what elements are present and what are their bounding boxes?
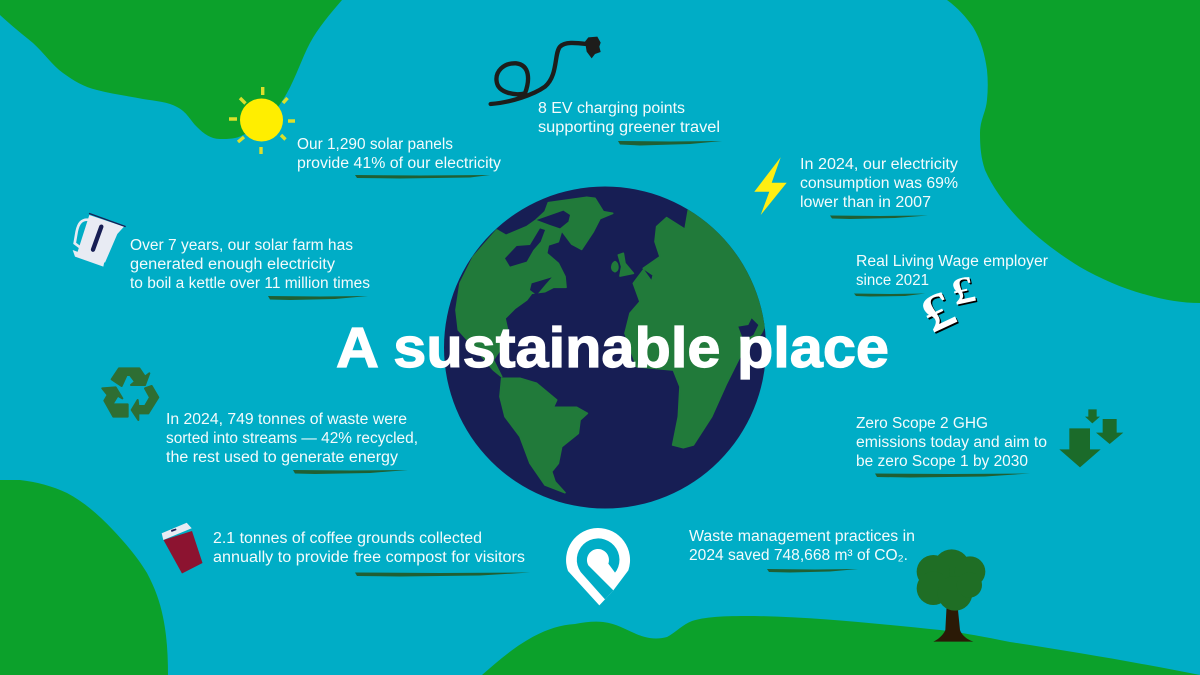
stat: kettle: to boil a kettle over 11 million times — [130, 275, 370, 292]
stat: coffee grounds: 2.1 tonnes of coffee grounds collected — [213, 530, 482, 547]
icon: down arrows — [1059, 409, 1123, 467]
stat: kettle: generated enough electricity — [130, 256, 335, 273]
baffin bay — [537, 211, 570, 228]
hudson bay — [505, 228, 545, 267]
stat: scope emissions: be zero Scope 1 by 2030 — [856, 453, 1028, 470]
hill: top right — [947, 0, 1200, 303]
icon: lightning bolt — [754, 157, 787, 215]
stat: coffee grounds: annually to provide free compost for visitors — [213, 549, 525, 566]
icon: pound signs: £ — [913, 280, 964, 344]
iceland and uk — [612, 253, 633, 276]
logo — [566, 528, 630, 605]
stat: electricity consumption: lower than in 2007 — [800, 194, 931, 211]
stat: solar panels: Our 1,290 solar panels — [297, 136, 453, 153]
north america — [456, 197, 613, 377]
icon: tree — [917, 549, 985, 642]
icon: pound signs: £ — [914, 281, 966, 346]
stat: waste management CO2: Waste management practices in — [689, 528, 915, 545]
stat: waste management CO2 — [689, 528, 985, 642]
icon: pound signs — [913, 268, 981, 346]
gulf — [530, 277, 552, 295]
icon: sun — [229, 87, 295, 154]
south america — [500, 378, 587, 493]
stat: kettle: Over 7 years, our solar farm has — [130, 237, 353, 254]
hill: top left — [0, 0, 342, 139]
stat: electricity consumption: In 2024, our electricity — [800, 156, 958, 173]
stat: electricity consumption — [754, 156, 958, 219]
stat: real living wage: Real Living Wage employer — [856, 253, 1048, 270]
globe — [444, 186, 797, 508]
stat: waste recycling — [102, 368, 418, 474]
stat: EV charging: supporting greener travel — [538, 119, 720, 136]
title: A sustainable place — [336, 316, 889, 380]
stat: waste recycling: the rest used to generate energy — [166, 449, 398, 466]
hill: bottom left — [0, 480, 168, 675]
stat: waste recycling: sorted into streams — 42% recycled, — [166, 430, 418, 447]
stat: solar panels: provide 41% of our electricity — [297, 155, 501, 172]
eurasia and africa — [624, 209, 765, 448]
stat: EV charging: 8 EV charging points — [538, 100, 685, 117]
continents — [456, 197, 797, 493]
icon: recycling arrows — [102, 368, 158, 420]
stat: kettle — [73, 213, 370, 300]
hill: bottom — [482, 616, 1200, 675]
stat: solar panels — [229, 87, 501, 178]
stat: waste management CO2: 2024 saved 748,668 m³ of CO₂. — [689, 547, 908, 564]
stat: EV charging — [491, 37, 722, 146]
icon: coffee cup — [162, 523, 202, 574]
stat: real living wage: since 2021 — [856, 272, 929, 289]
icon: pound signs: £ — [950, 270, 981, 315]
icon: plug and cable — [491, 37, 601, 104]
stat: coffee grounds — [162, 523, 530, 576]
icon: kettle — [73, 213, 126, 267]
stat: electricity consumption: consumption was 69% — [800, 175, 958, 192]
stat: waste recycling: In 2024, 749 tonnes of waste were — [166, 411, 407, 428]
icon: pound signs: £ — [948, 268, 979, 314]
ocean — [444, 186, 766, 508]
stat: scope emissions: Zero Scope 2 GHG — [856, 415, 988, 432]
stat: scope emissions — [856, 409, 1123, 478]
red sea — [738, 318, 758, 337]
stat: scope emissions: emissions today and aim to — [856, 434, 1047, 451]
stat: real living wage — [854, 253, 1048, 346]
